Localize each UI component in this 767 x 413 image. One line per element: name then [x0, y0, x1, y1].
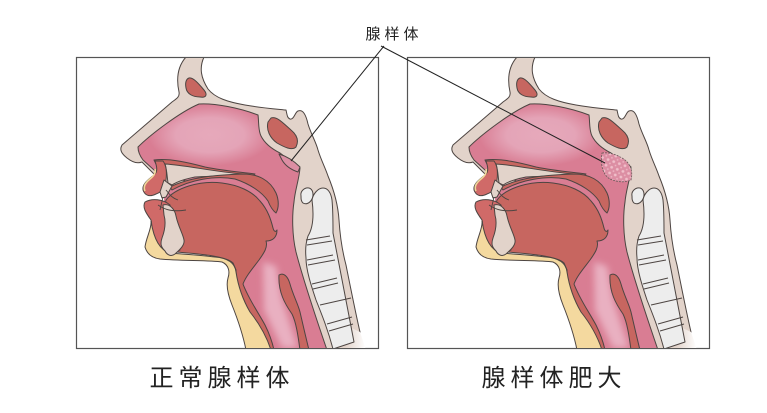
caption: enlarged adenoid: 腺样体肥大: [482, 365, 626, 392]
leader lines: [291, 46, 605, 163]
enlarged adenoid mass: [601, 153, 632, 182]
panel: normal adenoid: [76, 57, 378, 350]
head cross-section: normal: [121, 57, 366, 350]
label: adenoid: 腺样体: [365, 26, 423, 43]
panel: enlarged adenoid: [408, 57, 710, 350]
caption: normal adenoid: 正常腺样体: [150, 365, 294, 392]
infographic: normal and enlarged adenoid comparison: [76, 26, 710, 388]
head cross-section: enlarged: [452, 57, 697, 350]
